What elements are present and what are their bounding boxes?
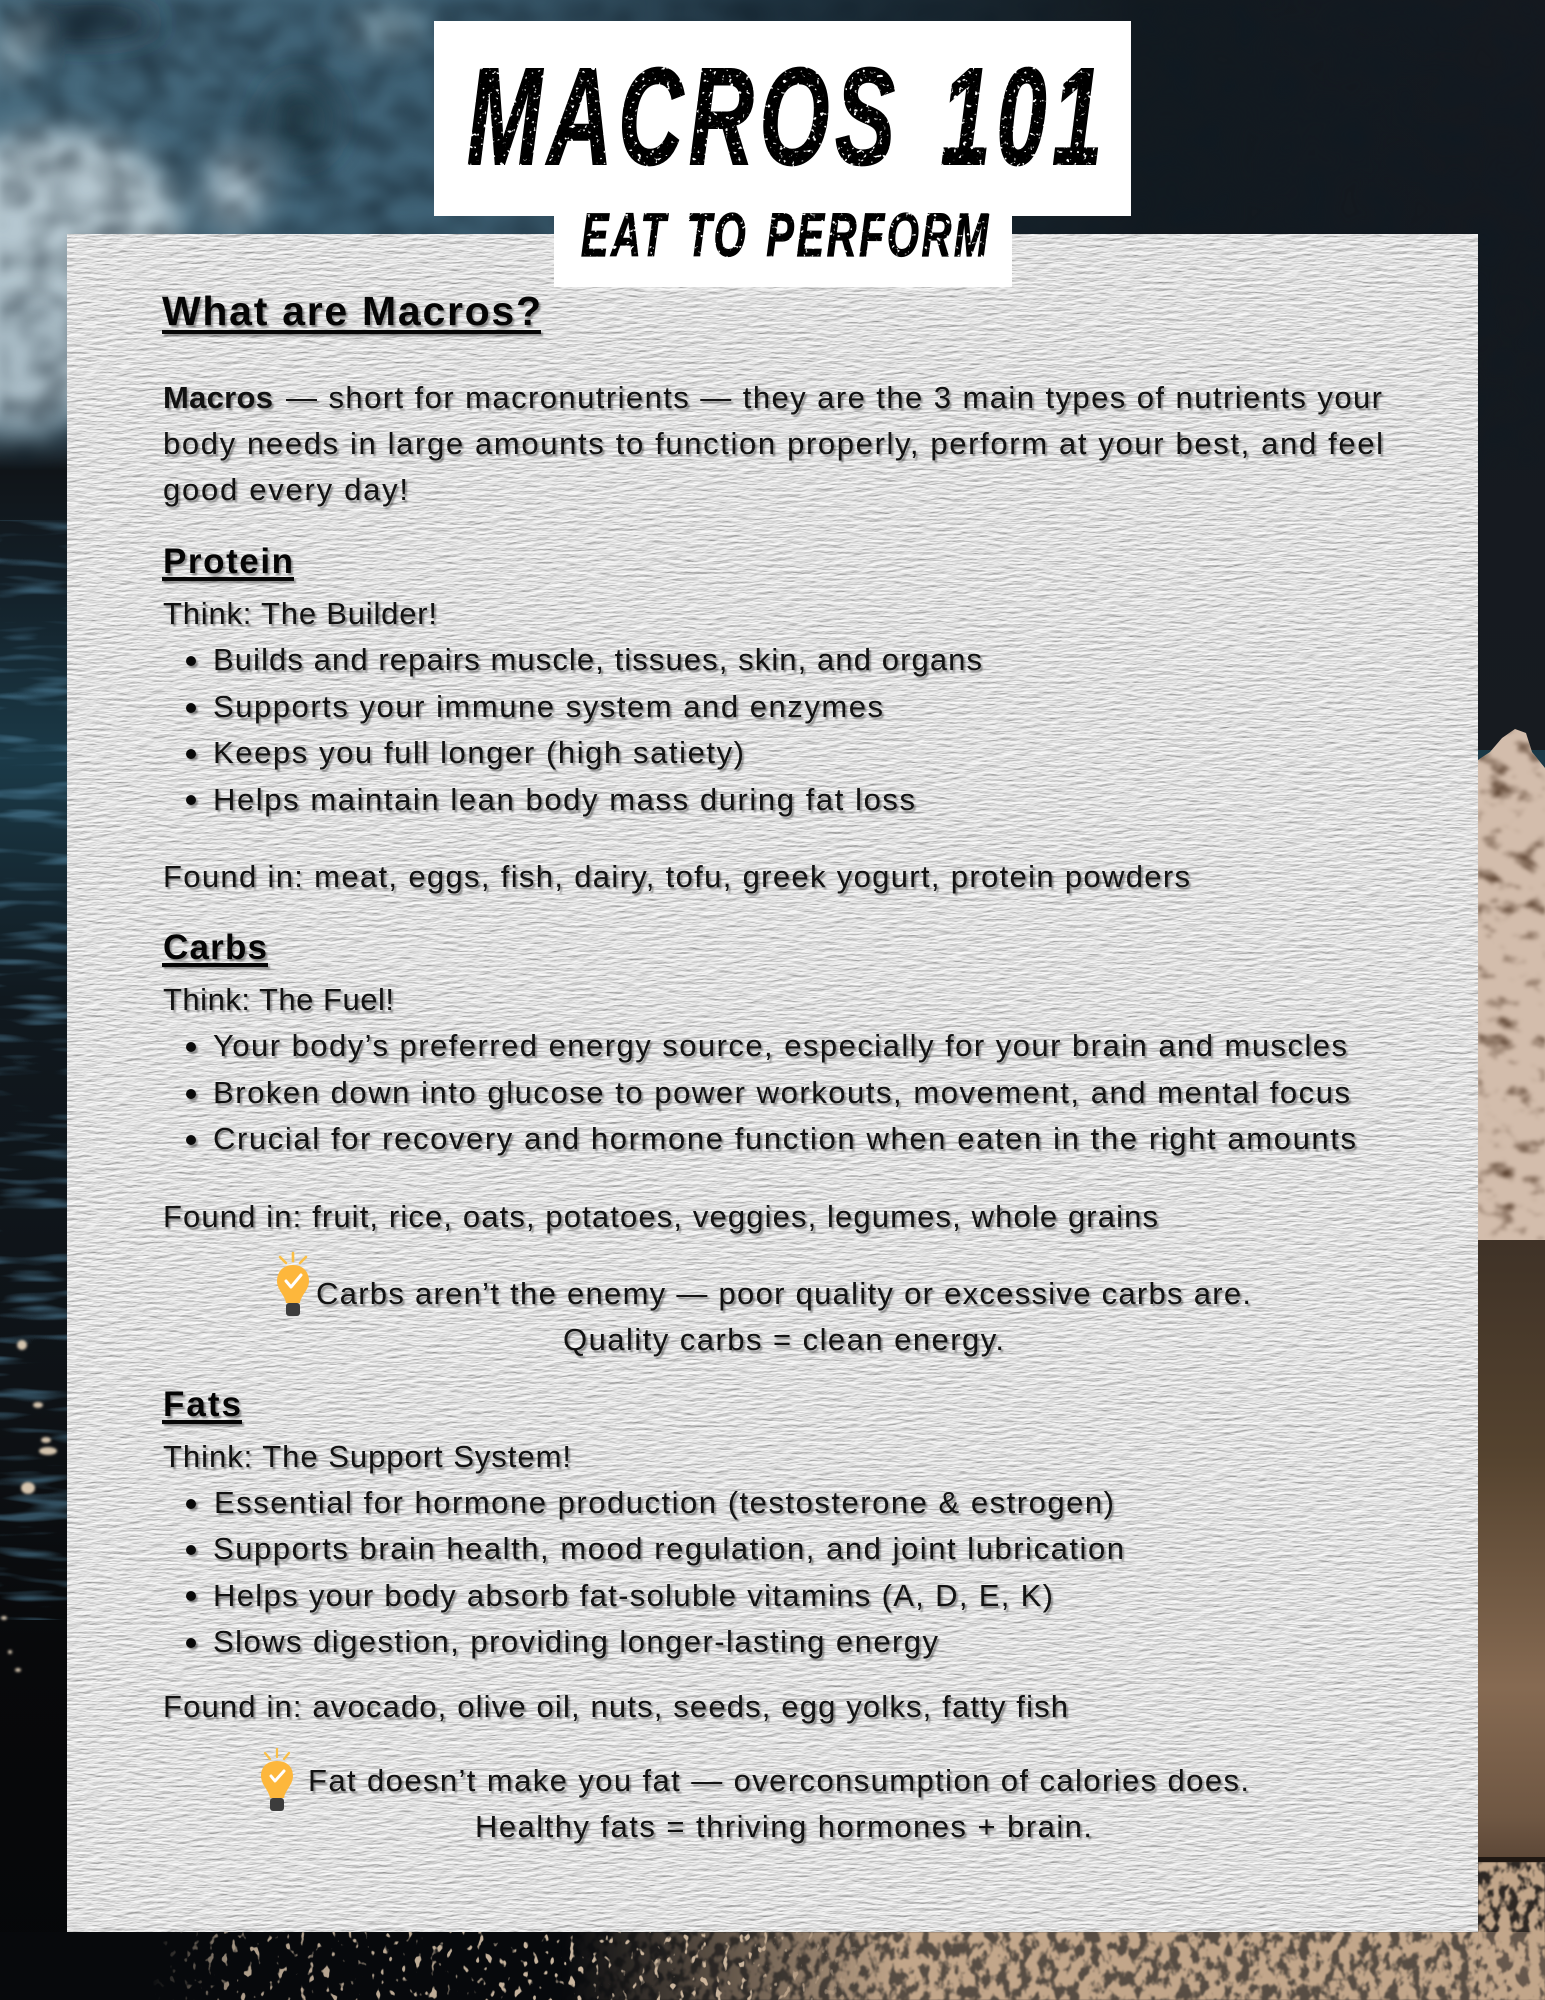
protein bullets: Helps maintain lean body mass during fat loss	[213, 782, 915, 817]
panel copy	[162, 288, 1383, 1844]
intro paragraph	[163, 380, 1383, 507]
carbs bullets: Broken down into glucose to power workouts, movement, and mental focus	[213, 1075, 1350, 1110]
specks of powder along left edge	[1, 1340, 57, 1672]
intro paragraph: Macros	[163, 380, 273, 415]
callout: fats tip	[308, 1763, 1249, 1844]
callout: carbs tip: Quality carbs = clean energy.	[563, 1322, 1004, 1357]
section: protein	[162, 542, 1190, 894]
icon: light bulb carbs	[277, 1253, 309, 1316]
fats bullets: Helps your body absorb fat-soluble vitamins (A, D, E, K)	[213, 1578, 1053, 1613]
fats bullets	[186, 1485, 1124, 1659]
intro paragraph: — short for macronutrients — they are the 3 main types of nutrients your	[286, 380, 1382, 415]
callout: fats tip: Healthy fats = thriving hormones + brain.	[475, 1809, 1092, 1844]
icon: light bulb fats	[261, 1749, 293, 1811]
protein tagline: Think: The Builder!	[163, 596, 437, 631]
subtitle: EAT TO PERFORM	[581, 201, 991, 269]
callout: carbs tip	[316, 1276, 1251, 1357]
carbs sources: Found in: fruit, rice, oats, potatoes, veggies, legumes, whole grains	[163, 1199, 1158, 1234]
heading: carbs: Carbs	[163, 928, 267, 967]
callout: carbs tip: Carbs aren’t the enemy — poor quality or excessive carbs are.	[316, 1276, 1251, 1311]
heading: protein: Protein	[163, 542, 293, 581]
fats bullets: Essential for hormone production (testosterone & estrogen)	[214, 1485, 1114, 1520]
protein bullets: Keeps you full longer (high satiety)	[213, 735, 744, 770]
scoop body	[1478, 1239, 1545, 1861]
carbs bullets: Crucial for recovery and hormone function when eaten in the right amounts	[213, 1121, 1356, 1156]
callout: fats tip: Fat doesn’t make you fat — overconsumption of calories does.	[308, 1763, 1249, 1798]
intro paragraph: body needs in large amounts to function properly, perform at your best, and feel	[163, 426, 1383, 461]
fats bullets: Slows digestion, providing longer-lasting energy	[213, 1624, 938, 1659]
fats sources: Found in: avocado, olive oil, nuts, seeds, egg yolks, fatty fish	[163, 1689, 1068, 1724]
intro paragraph: good every day!	[163, 472, 408, 507]
carbs bullets: Your body’s preferred energy source, especially for your brain and muscles	[213, 1028, 1347, 1063]
fats tagline: Think: The Support System!	[163, 1439, 571, 1474]
protein bullets: Builds and repairs muscle, tissues, skin, and organs	[213, 642, 982, 677]
protein bullets: Supports your immune system and enzymes	[213, 689, 883, 724]
section: carbs	[162, 928, 1356, 1357]
section: fats	[162, 1385, 1249, 1844]
carbs tagline: Think: The Fuel!	[163, 982, 394, 1017]
powder heap	[1478, 729, 1545, 1240]
title banner	[434, 21, 1131, 287]
title: MACROS 101	[467, 40, 1108, 194]
powder scoop at right edge	[1478, 729, 1545, 1862]
protein bullets	[186, 642, 982, 817]
protein sources: Found in: meat, eggs, fish, dairy, tofu, greek yogurt, protein powders	[163, 859, 1190, 894]
fats bullets: Supports brain health, mood regulation, and joint lubrication	[213, 1531, 1124, 1566]
heading: fats: Fats	[163, 1385, 241, 1424]
panel: textured main card	[67, 234, 1478, 1932]
carbs bullets	[186, 1028, 1356, 1156]
heading: what are macros: What are Macros?	[162, 288, 541, 334]
spilled powder at bottom	[0, 1862, 1545, 2000]
section: what are macros	[162, 288, 1383, 507]
